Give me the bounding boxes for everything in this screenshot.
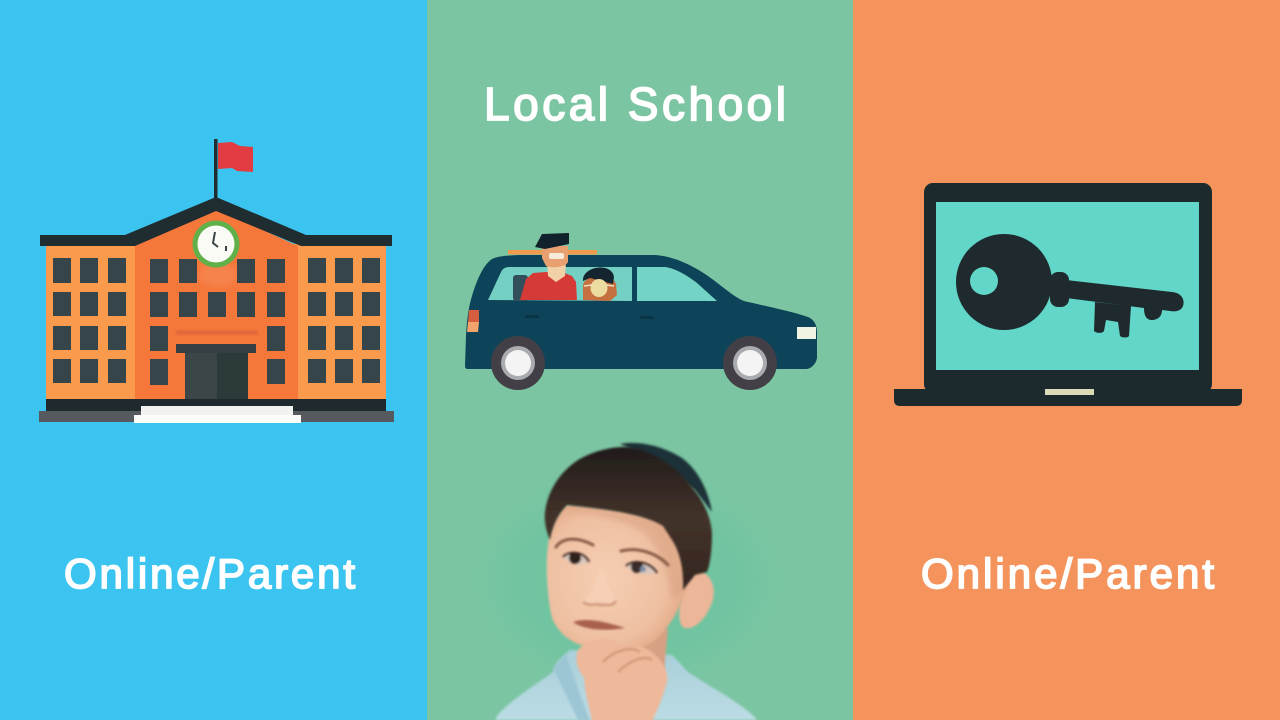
face — [547, 505, 686, 650]
laptop lid — [924, 183, 1212, 393]
screen — [936, 202, 1199, 370]
side wings — [46, 244, 386, 400]
icon: car with parent and child — [465, 233, 817, 390]
forehead shadow and cheek shading — [577, 508, 680, 595]
mouth — [573, 620, 625, 630]
child passenger — [583, 268, 617, 301]
tail light — [467, 310, 479, 332]
parent driver — [513, 233, 577, 301]
windows — [53, 258, 380, 385]
nose — [582, 591, 618, 607]
hair — [545, 447, 712, 590]
panel: middle green background — [427, 0, 854, 720]
soft background around boy — [506, 518, 750, 658]
shirt — [495, 650, 757, 720]
roof — [40, 197, 392, 246]
central block — [135, 209, 298, 400]
panel: left blue background — [0, 0, 428, 720]
surfboard on roof — [508, 250, 597, 254]
cap — [620, 443, 712, 512]
faded patch under clock — [199, 263, 237, 287]
windows — [488, 267, 632, 301]
shirt collar shadow — [553, 654, 590, 720]
faded lintel above door — [176, 330, 258, 335]
rear wheel — [491, 336, 545, 390]
hand — [576, 639, 667, 720]
neck — [640, 627, 670, 670]
door handles — [525, 315, 654, 319]
car body — [465, 255, 817, 369]
eyes — [563, 552, 657, 574]
clock — [192, 220, 240, 268]
icon: school building — [39, 139, 394, 423]
foundation — [46, 399, 386, 411]
icon: laptop with key — [894, 183, 1242, 406]
headlight — [797, 327, 816, 339]
steps — [134, 406, 301, 423]
trackpad notch — [1045, 389, 1094, 395]
label: Online/Parent right: Online/Parent — [921, 550, 1214, 597]
heading: Local School: Local School — [484, 78, 786, 130]
key — [956, 234, 1184, 338]
photo: thoughtful boy — [494, 441, 757, 720]
laptop base — [894, 389, 1242, 406]
eyebrows — [556, 539, 668, 565]
front wheel — [723, 336, 777, 390]
panel: right orange background — [853, 0, 1280, 720]
label: Online/Parent left: Online/Parent — [64, 550, 355, 597]
flag pole and flag — [214, 139, 253, 199]
door — [176, 344, 256, 406]
ear — [679, 572, 714, 628]
